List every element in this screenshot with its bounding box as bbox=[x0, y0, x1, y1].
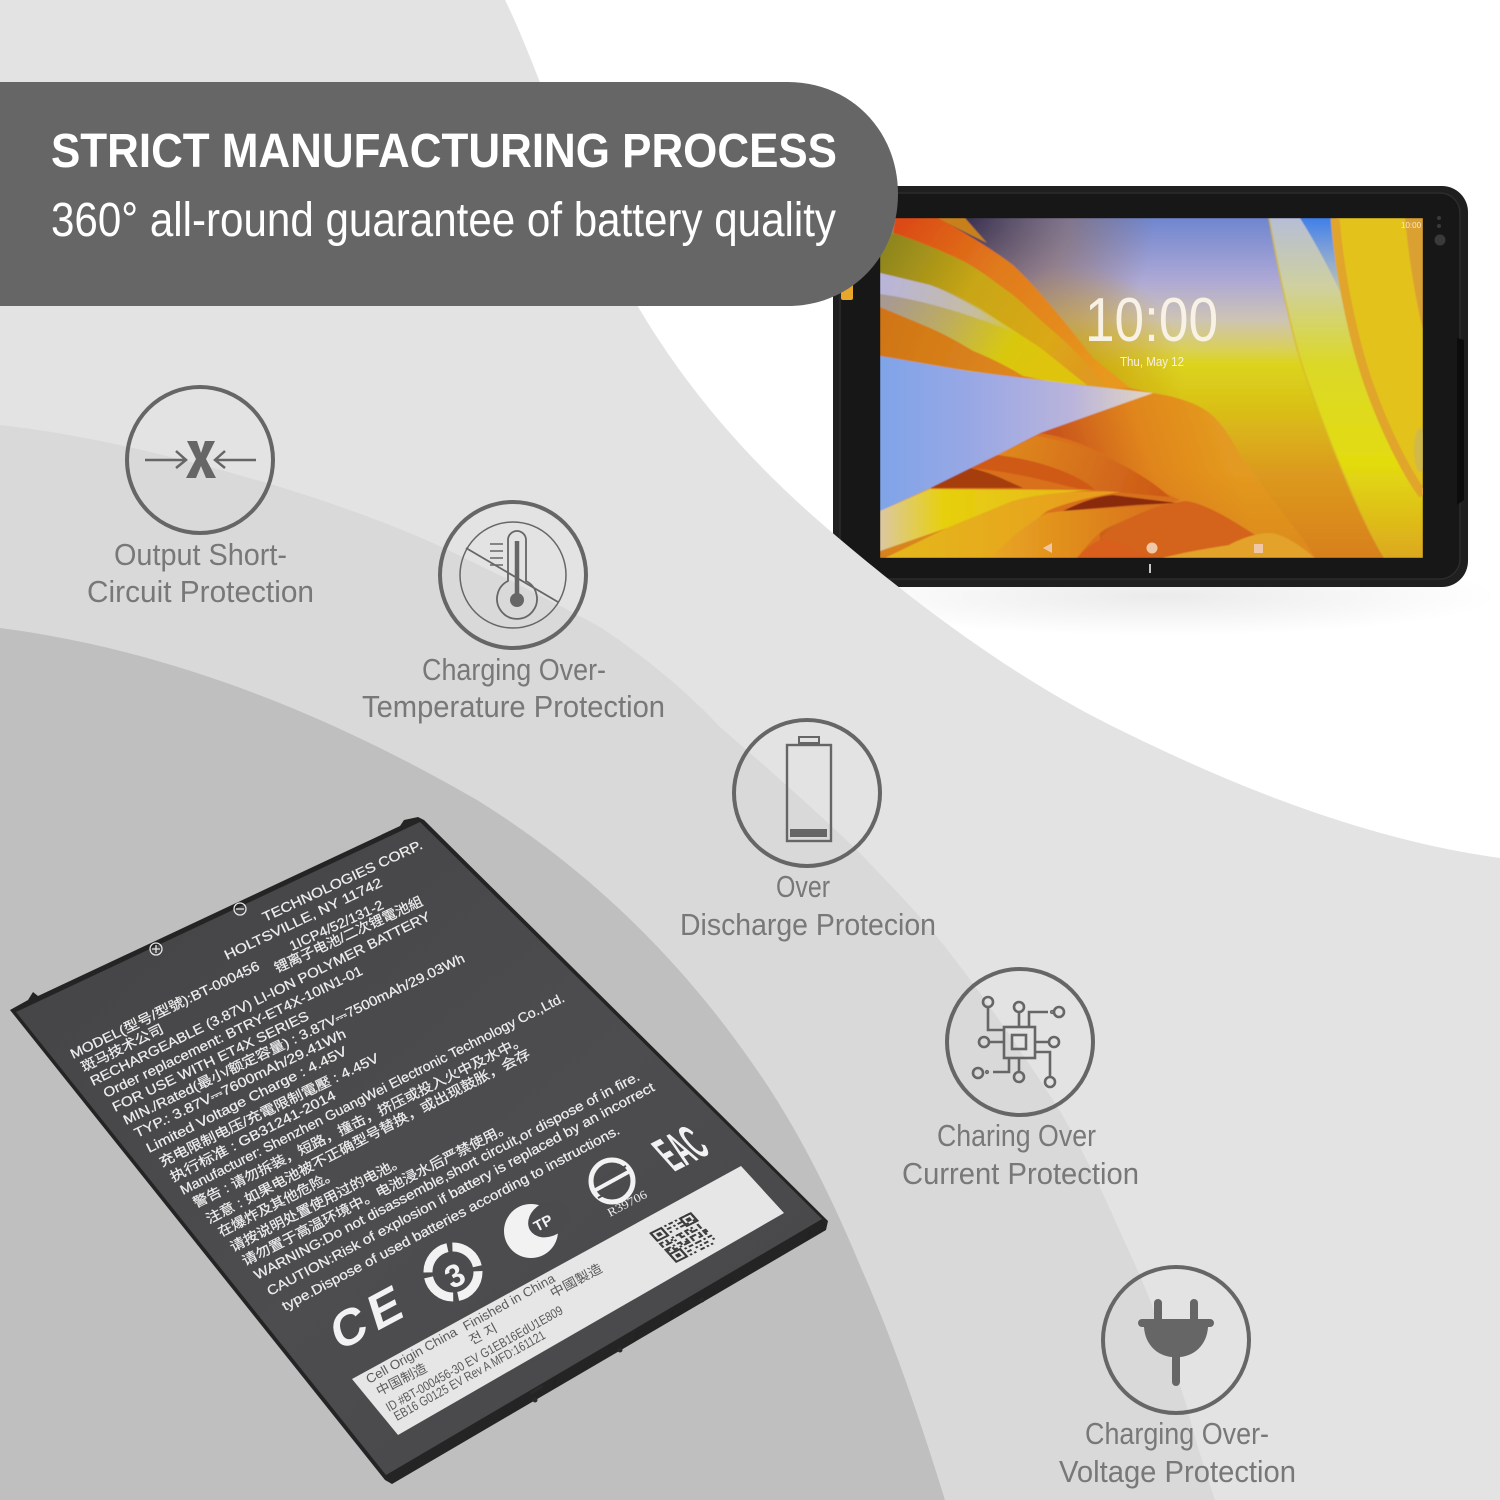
battery printed specification text: 在爆炸及其他危险。 bbox=[216, 1166, 340, 1240]
navigation buttons bbox=[1043, 542, 1263, 554]
orange side key bbox=[841, 284, 853, 300]
label: Output Short- bbox=[114, 537, 287, 572]
battery printed specification text: TECHNOLOGIES CORP. bbox=[260, 837, 425, 925]
tablet screen wallpaper bbox=[880, 218, 1426, 558]
feature: charging over current protection: Current Protection bbox=[902, 1156, 1139, 1191]
home indicator bbox=[1149, 564, 1151, 573]
battery printed specification text: RECHARGEABLE (3.87V) LI-ION POLYMER BATTERY bbox=[88, 909, 433, 1089]
EAC mark: EAC bbox=[642, 1117, 720, 1181]
battery printed specification text: Limited Voltage Charge : 4.45V bbox=[144, 1044, 349, 1156]
lock screen time: 10:00 bbox=[1085, 286, 1218, 355]
feature: output short-circuit protection bbox=[87, 387, 314, 609]
CE mark: CE bbox=[324, 1273, 408, 1362]
battery printed specification text: 请按说明处置使用过的电池。 bbox=[227, 1152, 407, 1255]
battery terminal marks bbox=[150, 903, 246, 955]
white information sticker: 전 지 bbox=[466, 1320, 500, 1348]
icon: crossed thermometer bbox=[440, 502, 586, 648]
battery printed specification text: MIN./Rated(最小/额定容量) : 3.87V⎓7500mAh/29.03Wh bbox=[120, 950, 467, 1128]
feature: charging over current protection bbox=[902, 969, 1139, 1191]
white information sticker: ID #BT-000456-30 EV G1EB16EdU1E809 bbox=[383, 1303, 565, 1415]
feature: output short-circuit protection: Circuit Protection bbox=[87, 574, 314, 609]
white information sticker: Finished in China bbox=[460, 1270, 558, 1334]
battery printed specification text: 1ICP4/52/131-2 bbox=[287, 897, 386, 954]
battery connector edge bbox=[530, 1230, 810, 1402]
C-TP mark bbox=[504, 1193, 577, 1258]
certification ring mark bbox=[591, 1160, 649, 1220]
tablet shadow bbox=[820, 556, 1500, 636]
icon: low battery bbox=[734, 720, 880, 866]
tablet body bbox=[833, 186, 1468, 587]
battery printed specification text: WARNING:Do not disassemble,short circuit,or dispose of in fire. bbox=[251, 1069, 642, 1283]
C-TP mark: TP bbox=[531, 1212, 556, 1236]
battery printed specification text: 警告 : 请勿拆装，短路，撞击，挤压或投入火中及水中。 bbox=[191, 1032, 528, 1211]
battery printed specification text: TYP.: 3.87V⎓7600mAh/29.41Wh bbox=[132, 1026, 348, 1141]
battery printed specification text: MODEL(型号/型號):BT-000456 bbox=[68, 958, 262, 1062]
background band: mid grey bbox=[0, 425, 1215, 1500]
battery printed specification text: Order replacement: BTRY-ET4X-10IN1-01 bbox=[101, 963, 365, 1101]
camera dots bbox=[1434, 216, 1446, 246]
battery printed specification text: FOR USE WITH ET4X SERIES bbox=[110, 1008, 311, 1115]
battery printed specification text: 执行标准 : GB31241-2014 bbox=[168, 1087, 339, 1185]
battery printed specification text: Manufacturer: Shenzhen GuangWei Electronic Technology Co.,Ltd. bbox=[178, 990, 567, 1198]
icon: power plug bbox=[1103, 1267, 1249, 1413]
feature: charging over-temperature protection bbox=[362, 502, 665, 724]
white information sticker bbox=[352, 1166, 784, 1435]
feature: charging over-voltage protection: Voltage Protection bbox=[1059, 1454, 1296, 1489]
label: Charging Over- bbox=[1085, 1416, 1269, 1451]
battery printed specification text: 请勿置于高温环境中。电池浸水后严禁使用。 bbox=[239, 1118, 514, 1269]
side connector bbox=[1457, 338, 1464, 505]
recycling 3 mark bbox=[428, 1247, 478, 1297]
white information sticker: 中國製造 bbox=[547, 1261, 605, 1301]
background band: dark grey bbox=[0, 628, 945, 1500]
recycling 3 mark: 3 bbox=[438, 1256, 471, 1296]
certification ring mark: R39706 bbox=[605, 1187, 649, 1220]
banner shape bbox=[0, 82, 898, 306]
heading banner bbox=[0, 82, 898, 306]
status bar: 10:00 bbox=[1401, 221, 1422, 230]
battery printed specification text: HOLTSVILLE, NY 11742 bbox=[222, 875, 385, 963]
icon: circuit chip bbox=[947, 969, 1093, 1115]
subtitle: 360° all-round guarantee of battery quality bbox=[51, 194, 836, 247]
title: STRICT MANUFACTURING PROCESS bbox=[51, 125, 837, 178]
white information sticker: Cell Origin China bbox=[363, 1324, 460, 1387]
battery printed specification text: 注意 : 如果电池被不正确型号替换，或出现鼓胀，会存 bbox=[203, 1045, 533, 1227]
battery printed specification text bbox=[68, 837, 657, 1314]
label: Charing Over bbox=[937, 1118, 1096, 1153]
feature: charging over-voltage protection bbox=[1059, 1267, 1296, 1489]
QR code bbox=[650, 1213, 717, 1262]
battery printed specification text: 充电限制电压/充電限制電壓 : 4.45V bbox=[157, 1050, 381, 1170]
battery printed specification text: 锂离子电池/二次锂電池組 bbox=[272, 893, 425, 976]
white information sticker: 中国制造 bbox=[374, 1360, 429, 1399]
label: Charging Over- bbox=[422, 652, 606, 687]
label: Over bbox=[776, 869, 830, 904]
battery body bbox=[10, 817, 828, 1484]
feature: charging over-temperature protection: Temperature Protection bbox=[362, 689, 665, 724]
battery product bbox=[10, 817, 828, 1484]
feature: over discharge protection bbox=[680, 720, 936, 942]
white information sticker: EB16 G0125 EV Rev A MFD:161121 bbox=[391, 1327, 548, 1424]
feature: over discharge protection: Discharge Protecion bbox=[680, 907, 936, 942]
icon: short-circuit X with arrows bbox=[127, 387, 273, 533]
lock screen date: Thu, May 12 bbox=[1120, 355, 1184, 369]
battery printed specification text: 斑马技术公司 bbox=[79, 1021, 166, 1075]
battery printed specification text: type.Dispose of used batteries according to instructions. bbox=[279, 1123, 622, 1314]
tablet device bbox=[833, 186, 1468, 587]
battery printed specification text: CAUTION:Risk of explosion if battery is replaced by an incorrect bbox=[264, 1079, 657, 1299]
